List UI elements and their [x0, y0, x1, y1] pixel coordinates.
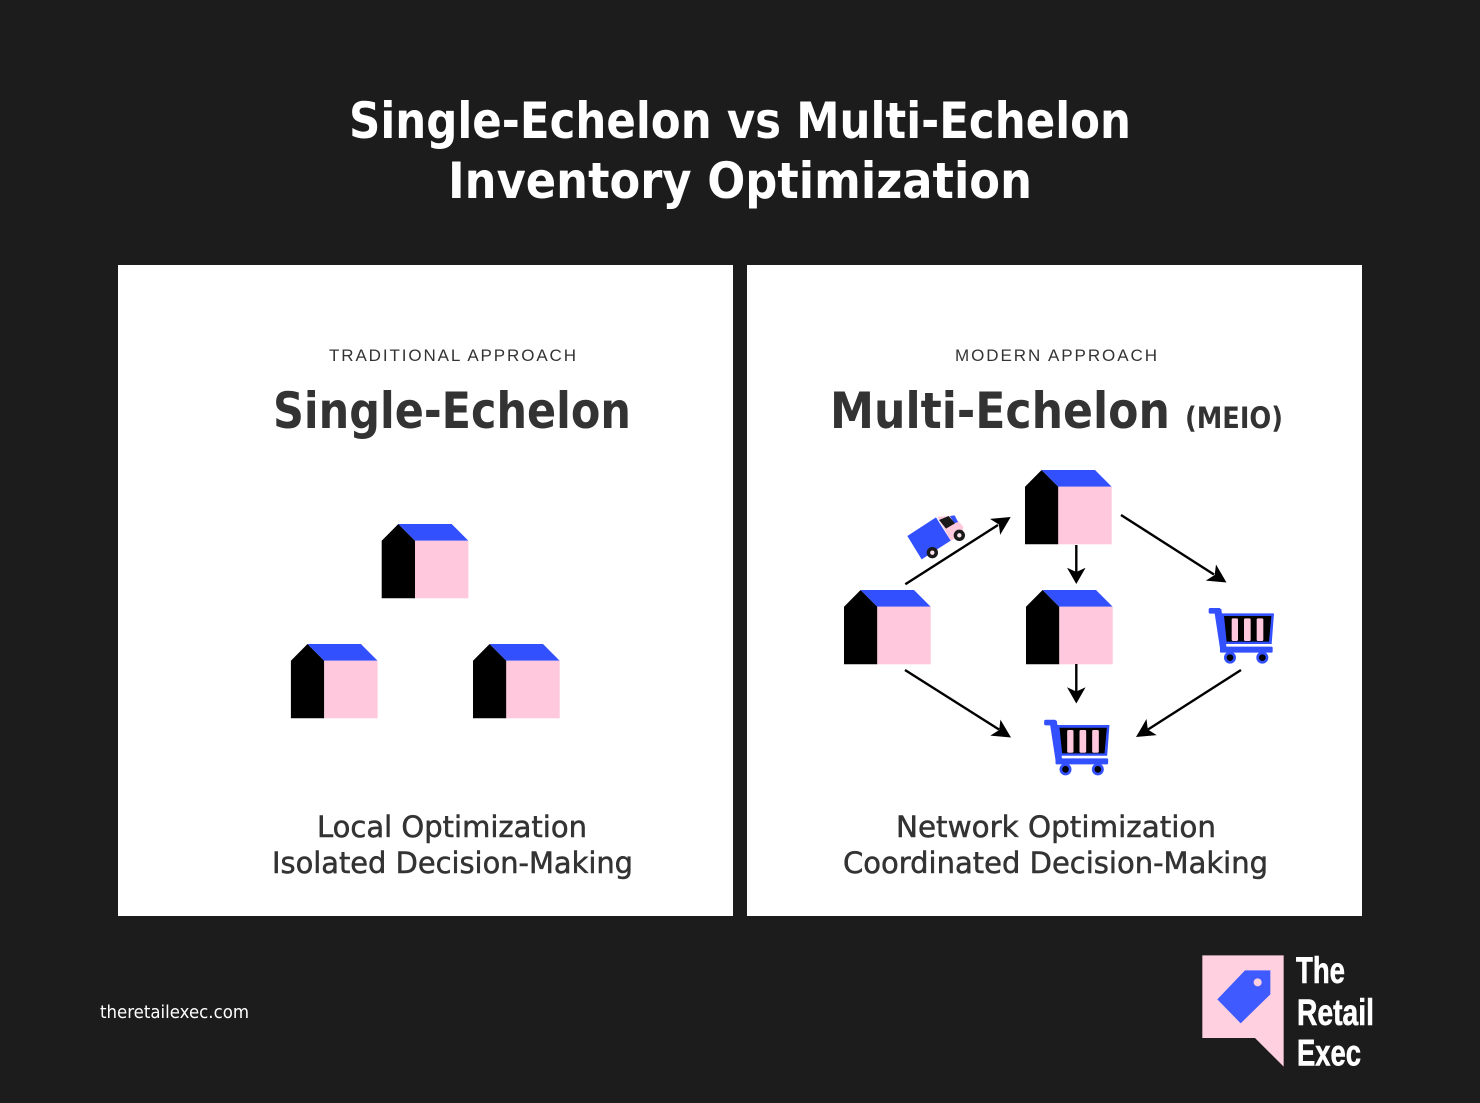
arrow: left warehouse to top warehouse: [905, 509, 1016, 584]
heading: multi-echelon: Multi-Echelon: [830, 382, 1170, 440]
icon: shopping cart bottom: [1044, 720, 1109, 775]
icon: shopping cart right: [1209, 608, 1274, 664]
heading: single-echelon: Single-Echelon: [273, 382, 631, 440]
title: Inventory Optimization: [448, 152, 1032, 210]
caption: single-echelon: Local Optimization: [317, 810, 587, 844]
icon: warehouse top: [382, 524, 468, 598]
icon: warehouse right: [473, 644, 560, 718]
title: [349, 92, 1131, 210]
caption: single-echelon: Isolated Decision-Making: [272, 846, 633, 880]
caption: multi-echelon: Network Optimization: [896, 810, 1216, 844]
caption: multi-echelon: Coordinated Decision-Making: [843, 846, 1268, 880]
arrow: top warehouse to right cart: [1121, 515, 1232, 591]
logo: The Retail Exec: [1202, 950, 1374, 1074]
icon: warehouse centre: [1026, 590, 1113, 664]
caption: single-echelon: [272, 810, 633, 880]
label: traditional approach: TRADITIONAL APPROACH: [329, 346, 576, 365]
arrow: right cart to bottom cart: [1131, 670, 1241, 745]
panel: multi-echelon: [747, 265, 1362, 916]
heading: multi-echelon: (MEIO): [1185, 401, 1283, 435]
icon: warehouse top: [1025, 470, 1112, 544]
logo mark: price tag speech bubble: [1202, 955, 1284, 1067]
logo wordmark: [1296, 950, 1374, 1074]
logo wordmark: Exec: [1297, 1032, 1361, 1074]
logo wordmark: The: [1296, 950, 1345, 991]
icon: warehouse left: [291, 644, 378, 718]
panel: single-echelon: [118, 265, 733, 916]
icon: warehouse left: [844, 590, 931, 664]
logo wordmark: Retail: [1297, 992, 1374, 1033]
caption: multi-echelon: [843, 810, 1268, 880]
title: Single-Echelon vs Multi-Echelon: [349, 92, 1131, 150]
label: modern approach: MODERN APPROACH: [955, 346, 1157, 365]
arrow: left warehouse to bottom cart: [905, 670, 1016, 746]
arrow: centre warehouse to bottom cart: [1067, 664, 1086, 704]
arrow: top warehouse to centre warehouse: [1067, 545, 1086, 584]
footer url: theretailexec.com: [100, 1003, 249, 1023]
icon: delivery truck: [907, 515, 965, 559]
